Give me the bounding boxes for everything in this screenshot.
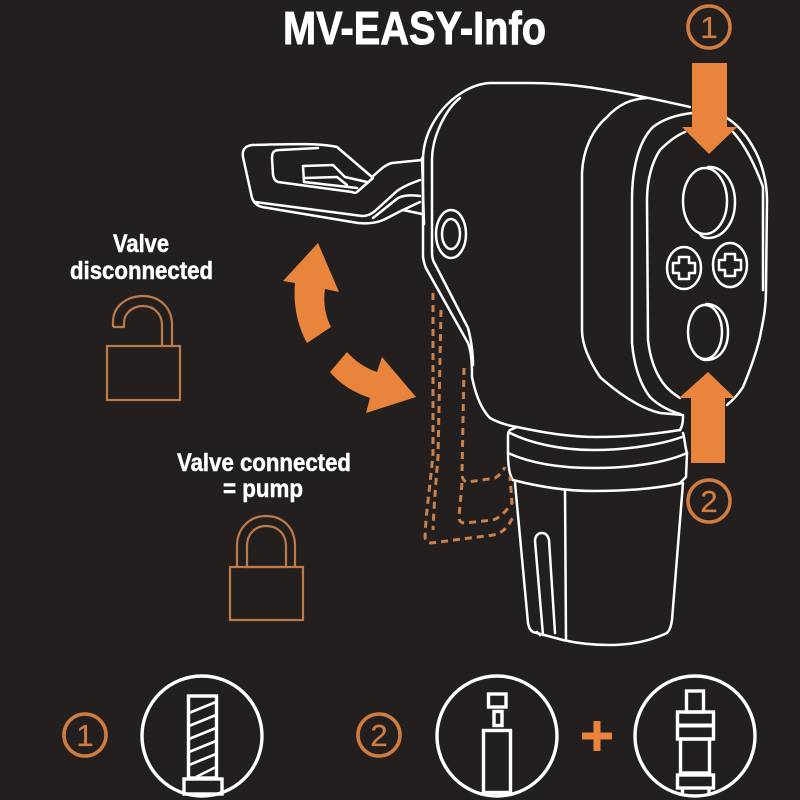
upper port bbox=[683, 167, 735, 238]
number 2 bottom bbox=[358, 714, 400, 756]
label: valve disconnected bbox=[70, 230, 213, 285]
collar bbox=[508, 427, 687, 491]
pivot bolt bbox=[436, 210, 466, 258]
lower port bbox=[688, 304, 728, 360]
number 1 top: 1 bbox=[700, 10, 718, 45]
number 2 top: 2 bbox=[700, 484, 718, 519]
number 2 bottom: 2 bbox=[370, 718, 388, 753]
icon: open padlock bbox=[107, 296, 180, 400]
pump lever bbox=[243, 144, 424, 224]
label: valve connected = pump bbox=[177, 449, 351, 503]
number 2 top bbox=[688, 480, 730, 522]
icon: presta valve bbox=[437, 676, 557, 796]
screw right bbox=[713, 243, 747, 287]
plus sign bbox=[582, 721, 612, 751]
dashed lever position bbox=[425, 293, 513, 543]
label: valve disconnected: Valve bbox=[113, 230, 169, 258]
arrow: press point 1 bbox=[682, 63, 737, 154]
icon: closed padlock bbox=[230, 516, 303, 620]
arrow: lever rotates down bbox=[330, 352, 416, 413]
front plate bbox=[632, 113, 767, 414]
icon: threaded valve bbox=[142, 676, 262, 796]
arrow: press point 2 bbox=[679, 372, 735, 463]
screw left bbox=[667, 247, 701, 289]
cup bbox=[515, 483, 683, 645]
arrow: lever rotates up bbox=[283, 243, 339, 343]
number 1 bottom: 1 bbox=[76, 718, 94, 753]
label: valve connected = pump: = pump bbox=[223, 475, 303, 503]
number 1 top bbox=[688, 6, 730, 48]
title: MV-EASY-Info bbox=[283, 2, 546, 54]
number 1 bottom bbox=[64, 714, 106, 756]
label: valve disconnected: disconnected bbox=[70, 257, 213, 285]
pump body bbox=[423, 83, 690, 437]
label: valve connected = pump: Valve connected bbox=[177, 449, 351, 477]
icon: schrader valve bbox=[635, 676, 755, 796]
